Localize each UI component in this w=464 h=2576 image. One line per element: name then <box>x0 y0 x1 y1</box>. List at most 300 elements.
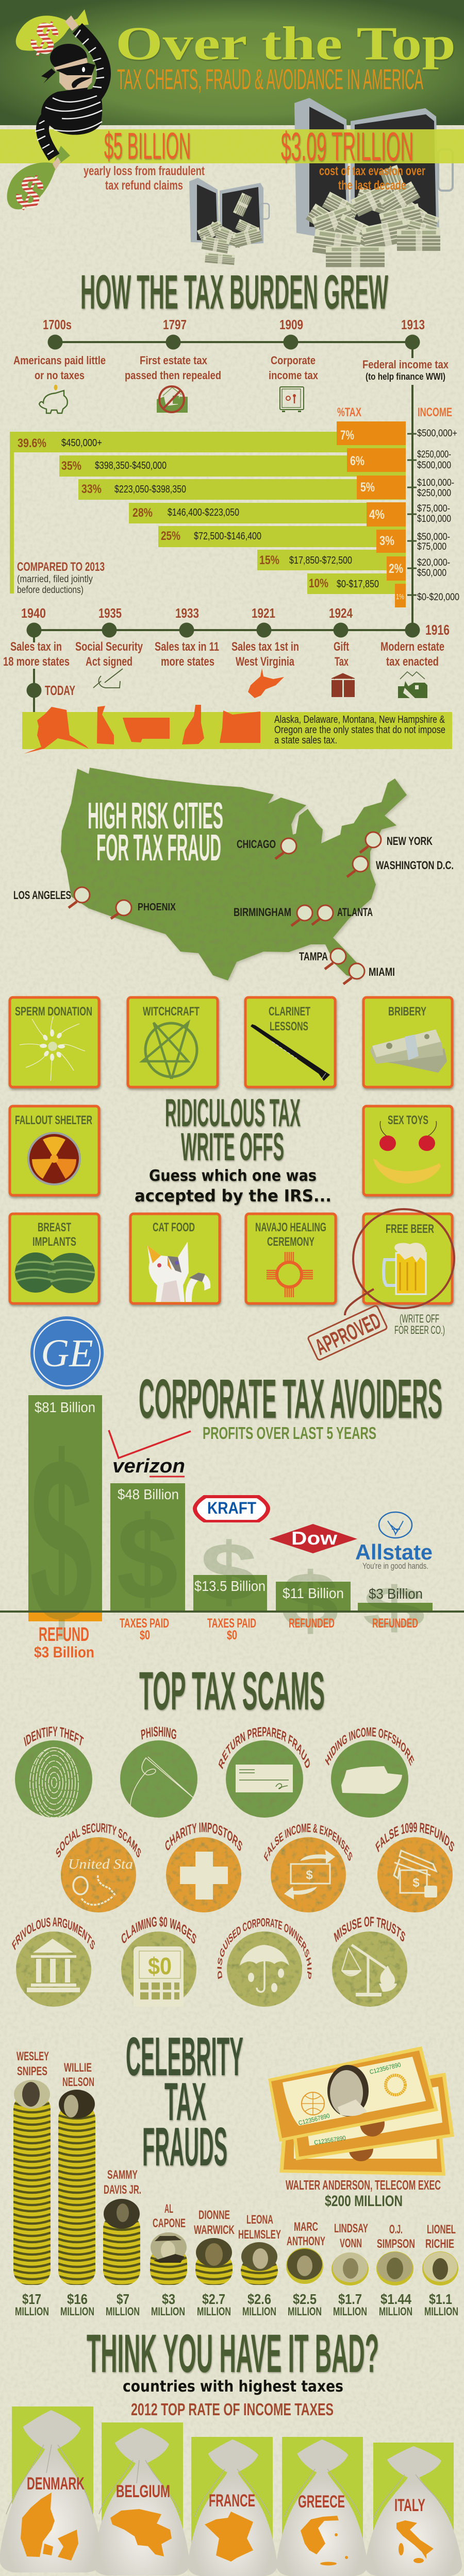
bill, front: C123567890 <box>297 2112 330 2127</box>
badge: false income and expenses: FALSE INCOME & EXPENSES <box>264 1824 353 1862</box>
stat: 3.09 trillion <box>281 124 425 193</box>
celebrity: leona helmsley: MILLION <box>242 2305 276 2318</box>
subheading handwriting: accepted by the IRS... <box>135 1186 332 1206</box>
stat: 3.09 trillion: the last decade <box>338 178 406 193</box>
icon: money with arrows: $ <box>306 1868 313 1882</box>
badge: phishing <box>120 1726 197 1818</box>
note: compared to 2013: COMPARED TO 2013 <box>17 560 105 574</box>
panel: sperm donation <box>10 997 99 1087</box>
panel: witchcraft <box>128 997 218 1087</box>
city: miami: MIAMI <box>369 965 395 978</box>
badge: hiding income offshore: HIDING INCOME OFFSHORE <box>325 1727 415 1766</box>
badge: false income and expenses <box>264 1824 353 1912</box>
event: 1700s <box>13 317 106 382</box>
approval circle mark <box>345 1204 459 1315</box>
small briefcase <box>189 178 269 265</box>
celebrity: marc anthony <box>286 2220 325 2318</box>
income axis labels: $250,000- <box>417 449 451 460</box>
map: united states: HIGH RISK CITIES <box>88 795 223 837</box>
celebrity: sammy davis jr: SAMMY <box>107 2168 138 2182</box>
country: belgium <box>93 2428 190 2575</box>
thief torso <box>41 88 102 135</box>
bracket: 39.6 percent: 39.6% <box>18 436 46 450</box>
logo: allstate <box>355 1512 433 1571</box>
icon: fingerprint <box>30 1748 78 1820</box>
label: Kraft taxes paid <box>207 1616 256 1642</box>
panel: navajo healing ceremony <box>246 1214 336 1303</box>
event: 1924: 1924 <box>329 605 353 621</box>
text: WRITE OFFS <box>181 1125 284 1169</box>
celebrity: oj simpson: $1.44 <box>380 2291 411 2307</box>
celebrity: leona helmsley: LEONA <box>246 2213 273 2227</box>
icon: west virginia outline <box>248 668 284 698</box>
celebrity: oj simpson: O.J. <box>389 2223 403 2236</box>
badge: claiming zero wages <box>120 1914 198 2007</box>
text: CELEBRITY <box>126 2026 243 2087</box>
event: 1933: Sales tax in 11 <box>155 640 219 654</box>
badge: return preparer fraud: RETURN PREPARER FRAUD <box>219 1727 310 1769</box>
celebrity: sammy davis jr <box>103 2168 141 2318</box>
dollar watermarks: $ <box>200 1526 257 1618</box>
bill, middle <box>289 2073 454 2160</box>
bill, front <box>268 2046 438 2142</box>
bracket: 15 percent: $17,850-$72,500 <box>289 555 352 566</box>
event: 1921: Sales tax 1st in <box>231 640 299 654</box>
badge: social security scams <box>56 1823 141 1912</box>
income axis labels: $75,000 <box>417 541 446 552</box>
stat: 5 billion: tax refund claims <box>105 178 183 193</box>
money bag, bottom <box>7 146 70 221</box>
city: washington dc <box>347 856 454 877</box>
subheading: countries with highest taxes: countries with highest taxes <box>123 2378 343 2396</box>
event: 1933 <box>155 605 219 669</box>
panel: clarinet lessons: LESSONS <box>270 1020 308 1033</box>
dollar watermarks <box>30 1408 425 1672</box>
panel: navajo healing ceremony: CEREMONY <box>267 1235 314 1249</box>
state: new hampshire <box>182 705 204 744</box>
panel: free beer <box>363 1214 452 1303</box>
map: united states: FOR TAX FRAUD <box>96 827 221 869</box>
note: write off for beer co: (WRITE OFF <box>400 1312 439 1325</box>
bracket: 28 percent: 28% <box>132 506 153 520</box>
icon: beer mug <box>384 1243 426 1294</box>
city: phoenix: PHOENIX <box>138 902 176 913</box>
bracket: 10 percent: 10% <box>309 577 328 590</box>
logo: kraft <box>193 1495 270 1522</box>
event: 1913: Federal income tax <box>362 358 449 371</box>
celebrity: willie nelson: WILLIE <box>64 2061 92 2075</box>
panel: breast implants: IMPLANTS <box>32 1235 76 1249</box>
celebrity: al capone: MILLION <box>151 2305 185 2318</box>
icon: estate crossed out <box>157 386 188 413</box>
income axis labels: $100,000- <box>417 478 454 488</box>
badge: charity impostors <box>165 1823 242 1912</box>
celebrity: wesley snipes: WESLEY <box>16 2049 49 2063</box>
city: los angeles <box>13 887 90 908</box>
note: write off for beer co <box>394 1312 445 1336</box>
chart: 1913 tax rates, orange bars: 6% <box>350 454 364 468</box>
chart: 2013 tax brackets, green bars <box>10 432 406 594</box>
label: today: TODAY <box>45 683 75 698</box>
celebrity: oj simpson: MILLION <box>379 2305 412 2318</box>
stamp: approved <box>307 1305 388 1362</box>
badge: identify theft <box>15 1726 92 1820</box>
chart: corporate profits: $48 Billion <box>118 1486 179 1502</box>
event: 1916: tax enacted <box>386 655 439 669</box>
city: phoenix <box>111 900 176 919</box>
city: los angeles: LOS ANGELES <box>13 889 71 902</box>
event: 1916: 1916 <box>425 622 450 638</box>
label: walter anderson: $200 MILLION <box>325 2193 403 2210</box>
bar: GE <box>28 1395 102 1611</box>
event: 1935: 1935 <box>98 605 122 621</box>
chart: 1913 tax rates, orange bars: 4% <box>369 507 385 522</box>
income axis labels: $50,000- <box>417 532 450 543</box>
celebrity: dionne warwick: DIONNE <box>198 2208 230 2222</box>
panel: breast implants: BREAST <box>38 1221 71 1234</box>
badge: phishing: PHISHING <box>141 1726 176 1740</box>
celebrity: willie nelson: NELSON <box>62 2075 94 2089</box>
event: 1935: Social Security <box>75 640 143 654</box>
note: compared to 2013: (married, filed jointly <box>17 574 93 585</box>
label: Allstate refunded: REFUNDED <box>372 1616 418 1631</box>
label: GE refund <box>34 1624 94 1661</box>
panel: clarinet lessons: CLARINET <box>269 1005 310 1019</box>
badge: charity impostors: CHARITY IMPOSTORS <box>165 1823 242 1851</box>
money bag, top <box>16 9 89 66</box>
bar: Verizon <box>110 1483 185 1611</box>
city: atlanta: ATLANTA <box>337 906 373 919</box>
badge: claiming zero wages: CLAIMING $0 WAGES <box>122 1916 196 1943</box>
country: denmark: DENMARK <box>27 2474 85 2494</box>
label: Kraft taxes paid: TAXES PAID <box>207 1616 256 1631</box>
icon: scales of justice <box>342 1945 397 1996</box>
icon: umbrella <box>240 1945 289 1992</box>
event: 1935 <box>75 605 143 669</box>
column header: percent tax: %TAX <box>337 405 361 419</box>
bracket: 35 percent: 35% <box>61 459 81 473</box>
stat: 5 billion <box>84 126 205 193</box>
bracket: 10 percent <box>309 577 379 590</box>
state: montana <box>123 718 170 742</box>
event: 1700s: Americans paid little <box>13 354 106 367</box>
income axis labels: $250,000 <box>417 488 451 499</box>
icon: signed check <box>236 1765 293 1792</box>
subheading handwriting: Guess which one was <box>149 1167 317 1185</box>
label: walter anderson <box>286 2177 441 2210</box>
map heading <box>88 795 223 869</box>
city: new york: NEW YORK <box>387 835 433 848</box>
badge: misuse of trusts: MISUSE OF TRUSTS <box>334 1917 405 1942</box>
yellow-green stats band <box>0 129 464 163</box>
chart: corporate profits: $13.5 Billion <box>194 1578 266 1594</box>
celebrity: lindsay vonn <box>332 2222 369 2318</box>
income axis labels: $75,000- <box>417 503 450 514</box>
event: 1909: 1909 <box>279 317 303 332</box>
logo: dow <box>269 1524 357 1553</box>
celebrity: dionne warwick <box>194 2208 235 2318</box>
callout text: a state sales tax. <box>274 735 337 746</box>
heading: celebrity tax frauds <box>126 2026 243 2177</box>
chart: 1913 tax rates, orange bars: 7% <box>340 428 354 443</box>
income axis labels: $100,000 <box>417 514 451 524</box>
bar: belgium <box>102 2422 183 2548</box>
country: italy <box>365 2446 462 2576</box>
badge: misuse of trusts <box>332 1914 407 2007</box>
label: Kraft taxes paid: $0 <box>227 1628 237 1642</box>
thief arms <box>35 15 104 170</box>
event: 1916: Modern estate <box>380 640 444 654</box>
event: 1797: passed then repealed <box>125 369 221 382</box>
icon: handcuffs and document <box>68 1856 133 1905</box>
chart: 1913 tax rates, orange bars: 5% <box>360 480 375 495</box>
bill, middle: C123567890 <box>313 2134 346 2146</box>
bracket: 35 percent <box>61 459 167 473</box>
illustration: thief with money bags <box>7 9 104 221</box>
chart: corporate profits: $81 Billion <box>35 1399 95 1415</box>
icon: wallet with bills: $ <box>412 1876 420 1890</box>
logo: allstate: You're in good hands. <box>362 1561 428 1571</box>
celebrity: sammy davis jr: $7 <box>117 2291 129 2307</box>
celebrity: al capone: CAPONE <box>153 2216 186 2230</box>
badge: false 1099 refunds <box>374 1820 456 1912</box>
illustration: cash bills <box>268 2046 454 2176</box>
bracket: 25 percent: $72,500-$146,400 <box>194 531 261 542</box>
celebrity: leona helmsley: $2.6 <box>247 2291 271 2307</box>
celebrity: marc anthony: ANTHONY <box>287 2234 325 2248</box>
timeline, top row <box>13 317 449 630</box>
heading: ridiculous tax write offs <box>165 1091 301 1169</box>
callout band: states with no sales tax <box>22 705 452 754</box>
country: greece <box>276 2439 368 2576</box>
illustration: briefcases of cash <box>189 98 453 267</box>
header background <box>0 0 464 125</box>
badge: false 1099 refunds: FALSE 1099 REFUNDS <box>375 1822 454 1853</box>
bar: denmark <box>12 2406 93 2548</box>
celebrity: oj simpson <box>376 2223 415 2318</box>
bracket: 28 percent: $146,400-$223,050 <box>168 507 239 518</box>
title: Over the Top <box>115 17 456 70</box>
celebrity: oj simpson: SIMPSON <box>377 2237 415 2251</box>
country: denmark <box>0 2410 103 2572</box>
chart: 1913 tax rates, orange bars: 2% <box>389 562 403 576</box>
celebrity: lindsay vonn: VONN <box>340 2236 362 2250</box>
bill, back <box>279 2112 445 2176</box>
event: 1913 <box>362 317 449 382</box>
panel: bribery <box>363 997 452 1087</box>
celebrity: marc anthony: MARC <box>294 2220 318 2234</box>
dollar watermarks: $ <box>117 1492 178 1625</box>
event: 1797: First estate tax <box>140 354 208 367</box>
panel: sex toys: SEX TOYS <box>388 1113 428 1127</box>
bar: Allstate <box>358 1603 433 1611</box>
icon: cash stacks <box>370 1029 447 1073</box>
event: 1940: Sales tax in <box>10 640 62 654</box>
celebrity: dionne warwick: MILLION <box>197 2305 231 2318</box>
bill, front: C123567890 <box>369 2061 402 2076</box>
chart: top income tax rates <box>0 2406 462 2576</box>
celebrity: lindsay vonn: LINDSAY <box>334 2222 368 2235</box>
income axis labels: $50,000 <box>417 568 446 579</box>
pile of cash, large <box>306 165 440 267</box>
city: tampa <box>299 948 346 969</box>
badge: frivolous arguments: FRIVOLOUS ARGUMENTS <box>12 1918 95 1951</box>
money bag, top: $ <box>23 10 67 66</box>
event: 1797 <box>125 317 221 382</box>
event: 1921 <box>231 605 299 669</box>
icon: radiation hatch <box>28 1133 80 1184</box>
city: birmingham <box>234 905 312 926</box>
celebrity: willie nelson <box>58 2061 95 2318</box>
icon: clarinet <box>251 1024 330 1081</box>
callout text <box>274 714 445 746</box>
dollar watermarks: $ <box>362 1574 425 1641</box>
income axis labels <box>407 428 459 603</box>
icon: piggy bank <box>39 384 68 413</box>
logo: verizon: verizon <box>112 1455 185 1477</box>
panel: fallout shelter: FALLOUT SHELTER <box>15 1113 92 1127</box>
badge: disguised corporate ownership: DISGUISED CORPORATE OWNERSHIP <box>218 1918 311 1979</box>
panel: bribery: BRIBERY <box>388 1005 426 1019</box>
logo: general electric <box>30 1316 104 1389</box>
badge: hiding income offshore <box>325 1727 415 1818</box>
icon: court house <box>27 1939 80 1992</box>
celebrity: marc anthony: MILLION <box>288 2305 322 2318</box>
event: 1916 <box>380 622 450 669</box>
bracket: 25 percent <box>161 529 261 543</box>
stat: 3.09 trillion: cost of tax evasion over <box>319 164 425 178</box>
celebrity: sammy davis jr: DAVIS JR. <box>104 2183 141 2197</box>
icon: sperm around egg <box>20 1016 85 1081</box>
panel: cat food <box>130 1214 220 1303</box>
bracket: 10 percent: $0-$17,850 <box>337 579 379 590</box>
bracket: 39.6 percent <box>18 436 102 450</box>
bar: Dow <box>276 1582 351 1611</box>
panel: free beer: FREE BEER <box>386 1222 434 1236</box>
icon: safe <box>280 387 304 412</box>
heading: celebrity tax frauds: TAX <box>164 2072 206 2132</box>
state: delaware <box>97 706 114 744</box>
city: miami <box>343 963 395 984</box>
label: Verizon taxes paid: $0 <box>140 1628 150 1642</box>
city: atlanta <box>312 905 373 925</box>
income axis labels: $20,000- <box>417 557 450 568</box>
bracket: 33 percent: $223,050-$398,350 <box>114 484 186 495</box>
event: 1909: income tax <box>269 369 319 382</box>
celebrity: wesley snipes <box>13 2049 51 2318</box>
panel: breast implants <box>10 1214 99 1303</box>
celebrity: dionne warwick: WARWICK <box>194 2223 235 2237</box>
bracket: 33 percent: 33% <box>81 482 102 496</box>
stamp: approved: APPROVED <box>311 1308 385 1360</box>
state: alaska <box>24 707 89 754</box>
icon: cross <box>180 1852 228 1900</box>
icon: pentagram <box>142 1023 197 1079</box>
event: 1935: Act signed <box>86 655 132 669</box>
event: 1700s: or no taxes <box>35 369 85 382</box>
event: 1933: more states <box>161 655 214 669</box>
bar: greece <box>282 2437 363 2548</box>
event: 1924 <box>329 605 353 669</box>
large briefcase <box>294 98 453 242</box>
panel: cat food: CAT FOOD <box>153 1221 195 1234</box>
celebrity: leona helmsley: HELMSLEY <box>238 2228 281 2242</box>
chart: celebrity coin stacks <box>13 2049 458 2318</box>
event: 1933: 1933 <box>175 605 199 621</box>
celebrity: lindsay vonn: $1.7 <box>338 2291 362 2307</box>
country: france: FRANCE <box>209 2491 255 2511</box>
bracket: 15 percent: 15% <box>259 553 279 567</box>
event: 1909: Corporate <box>271 354 316 367</box>
chart: 1913 tax rates, orange bars: 3% <box>379 534 394 548</box>
bar: italy <box>373 2443 454 2548</box>
icon: signing hand <box>93 669 123 688</box>
timeline, bottom row <box>3 605 450 712</box>
celebrity: wesley snipes: $17 <box>22 2291 41 2307</box>
celebrity: sammy davis jr: MILLION <box>106 2305 140 2318</box>
text: FRAUDS <box>142 2116 227 2177</box>
refund bar: GE <box>28 1613 102 1621</box>
icon: yacht <box>341 1766 402 1794</box>
event: 1921: West Virginia <box>236 655 294 669</box>
chart: corporate profits <box>0 1395 464 1672</box>
panel: navajo healing ceremony: NAVAJO HEALING <box>255 1221 326 1234</box>
logo: dow: Dow <box>291 1528 338 1549</box>
city: tampa: TAMPA <box>299 950 328 963</box>
city: chicago <box>237 838 296 859</box>
badge: return preparer fraud <box>219 1727 310 1818</box>
icon: handcuffs and document: United Sta <box>68 1856 133 1872</box>
country: france <box>188 2439 277 2576</box>
celebrity: wesley snipes: SNIPES <box>17 2064 47 2078</box>
event: 1921: 1921 <box>252 605 275 621</box>
event: 1924: Tax <box>335 655 349 669</box>
income axis labels: $500,000+ <box>417 428 457 439</box>
celebrity: dionne warwick: $2.7 <box>202 2291 225 2307</box>
country: italy: ITALY <box>394 2496 425 2515</box>
label: Verizon taxes paid <box>120 1616 169 1642</box>
event: 1913: 1913 <box>401 317 425 332</box>
city: new york <box>360 832 433 853</box>
event: 1940 <box>3 605 70 669</box>
logo: general electric: GE <box>41 1332 93 1375</box>
icon: money with arrows <box>284 1850 335 1900</box>
note: compared to 2013 <box>17 560 105 596</box>
bar: france <box>191 2437 273 2548</box>
city: birmingham: BIRMINGHAM <box>234 906 291 919</box>
icon: calculator: $0 <box>148 1953 172 1979</box>
celebrity: marc anthony: $2.5 <box>293 2291 317 2307</box>
celebrity: lionel richie <box>422 2223 458 2318</box>
event: 1797: 1797 <box>163 317 187 332</box>
panel: sex toys <box>363 1106 452 1195</box>
event: 1700s: 1700s <box>43 317 72 332</box>
bracket: 15 percent <box>259 553 352 567</box>
icon: gift box <box>332 673 355 697</box>
badge: frivolous arguments <box>11 1916 96 2007</box>
icon: zia sun symbol <box>267 1252 313 1297</box>
celebrity: willie nelson: $16 <box>67 2291 88 2307</box>
bracket: 35 percent: $398,350-$450,000 <box>95 460 167 471</box>
icon: calico cat <box>147 1242 210 1302</box>
label: GE refund: REFUND <box>39 1624 89 1646</box>
chart title: 2012 TOP RATE OF INCOME TAXES <box>131 2400 334 2419</box>
country: belgium: BELGIUM <box>116 2482 170 2501</box>
celebrity: lionel richie: $1.1 <box>429 2291 452 2307</box>
bracket: 33 percent <box>81 482 186 496</box>
event: 1924: Gift <box>334 640 349 654</box>
subheading handwriting <box>135 1167 332 1206</box>
